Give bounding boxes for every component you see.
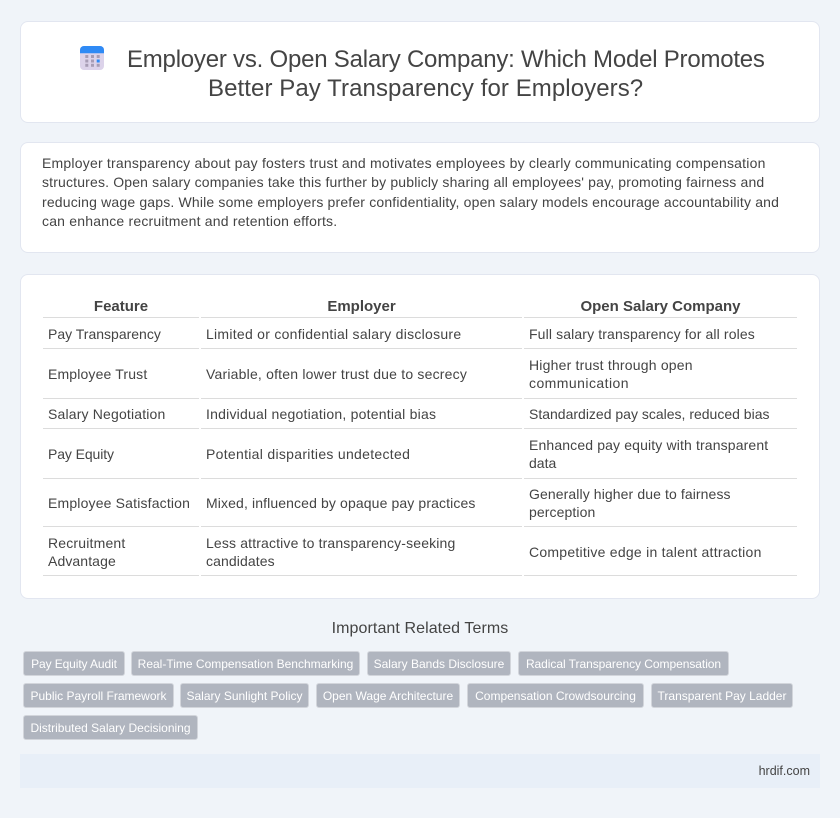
text block: introduction: reducing wage gaps. While some employers prefer confidentiality, open salary models encourage accountability and [42,194,779,210]
tag [23,715,198,740]
tag: Compensation Crowdsourcing [475,689,636,703]
tag: Real-Time Compensation Benchmarking [138,657,353,671]
table row: Employee Satisfaction: Generally higher due to fairness [529,486,731,502]
text block: introduction [42,155,779,229]
panel: header [20,21,820,123]
table row: Recruitment Advantage: Competitive edge in talent attraction [529,544,762,560]
table row: Employee Satisfaction: perception [529,504,595,520]
tag: Pay Equity Audit [31,657,117,671]
table header row: Open Salary Company [580,298,741,315]
table row: Pay Equity: Potential disparities undetected [206,446,410,462]
table row: Salary Negotiation: Standardized pay scales, reduced bias [529,406,769,422]
tag: Transparent Pay Ladder [658,689,786,703]
tag [651,683,793,708]
table row: Employee Trust: Variable, often lower trust due to secrecy [206,366,467,382]
table row: Employee Trust: communication [529,375,629,391]
table row: Pay Transparency: Limited or confidential salary disclosure [206,326,461,342]
tag [23,651,125,676]
table row: Employee Satisfaction: Mixed, influenced by opaque pay practices [206,495,476,511]
table header row [43,298,797,318]
tag: Public Payroll Framework [30,689,167,703]
icon: calendar [80,46,104,70]
footer bar [20,754,820,788]
table row: Pay Equity: data [529,455,556,471]
table row: Pay Transparency: Pay Transparency [48,326,161,342]
table row: Employee Trust: Employee Trust [48,366,147,382]
table row: Pay Transparency: Full salary transparency for all roles [529,326,755,342]
table row: Recruitment Advantage: Recruitment [48,535,125,551]
title: Better Pay Transparency for Employers? [208,75,643,102]
table row: Recruitment Advantage: Advantage [48,553,116,569]
table row: Salary Negotiation [43,406,797,429]
table row: Salary Negotiation: Individual negotiation, potential bias [206,406,436,422]
table row: Employee Satisfaction: Employee Satisfaction [48,495,190,511]
tag: Salary Sunlight Policy [186,689,303,703]
table row: Recruitment Advantage: candidates [206,553,275,569]
tag: Open Wage Architecture [323,689,453,703]
heading: Important Related Terms: Important Related Terms [332,620,508,637]
tag [367,651,511,676]
title [127,46,765,102]
tag [131,651,360,676]
table row: Pay Equity: Enhanced pay equity with transparent [529,437,768,453]
text block: introduction: Employer transparency about pay fosters trust and motivates employees by clearly communicating compensation [42,155,766,171]
tag: Radical Transparency Compensation [526,657,721,671]
table row: Recruitment Advantage: Less attractive to transparency-seeking [206,535,455,551]
table row: Employee Satisfaction [43,486,797,527]
footer text: hrdif.com: hrdif.com [759,764,810,778]
tag: Distributed Salary Decisioning [30,721,191,735]
tag: Salary Bands Disclosure [374,657,504,671]
table row: Recruitment Advantage [43,535,797,576]
table row: Employee Trust [43,357,797,399]
panel: introduction [20,142,820,253]
table header row: Employer [327,298,396,315]
tag [467,683,644,708]
tag [316,683,460,708]
table row: Salary Negotiation: Salary Negotiation [48,406,165,422]
tag [23,683,174,708]
table row: Pay Transparency [43,326,797,349]
table row: Employee Trust: Higher trust through open [529,357,693,373]
text block: introduction: structures. Open salary companies take this further by publicly sharing all employees' pay, promoting fairness and [42,174,764,190]
tag list: related terms [23,651,793,740]
title: Employer vs. Open Salary Company: Which Model Promotes [127,46,765,73]
table row: Pay Equity: Pay Equity [48,446,114,462]
table header row: Feature [94,298,148,315]
tag [180,683,309,708]
panel: comparison table [20,274,820,599]
table row: Pay Equity [43,437,797,479]
tag [518,651,729,676]
text block: introduction: can enhance recruitment and retention efforts. [42,213,337,229]
